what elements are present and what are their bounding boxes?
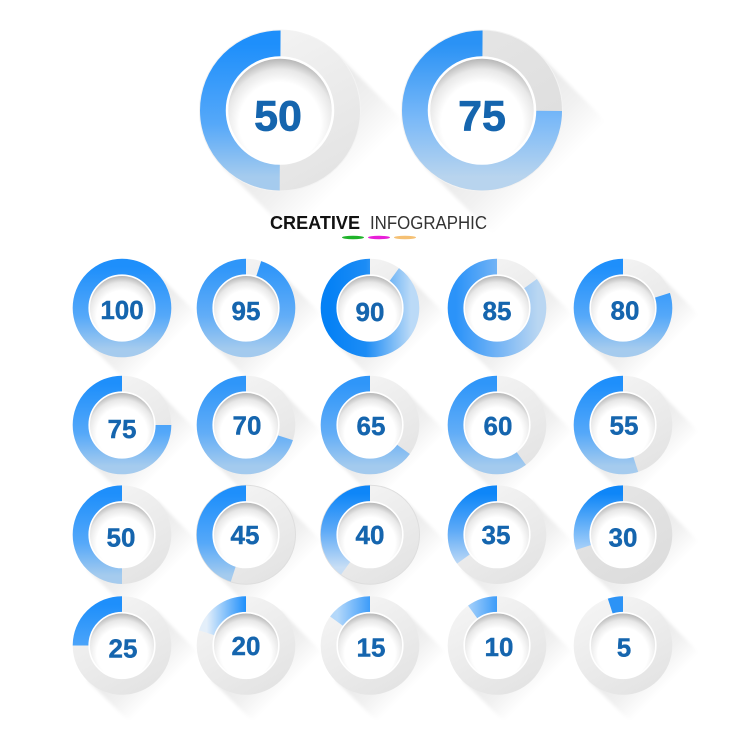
donut: large 75 <box>402 30 617 246</box>
donut: 35 <box>448 485 578 616</box>
value 50: 50 <box>254 92 302 140</box>
donut: 50 <box>73 485 203 616</box>
donut: 45 <box>196 485 327 616</box>
donut: 80 <box>574 259 704 389</box>
value 90: 90 <box>356 297 384 327</box>
donut: 65 <box>321 376 451 506</box>
value 80: 80 <box>611 296 639 326</box>
donut: 30 <box>574 485 704 616</box>
value 30: 30 <box>609 523 637 553</box>
value 75: 75 <box>458 92 506 140</box>
value 70: 70 <box>233 410 261 440</box>
title <box>270 213 487 233</box>
donut: 5 <box>574 596 704 727</box>
value 25: 25 <box>109 634 137 664</box>
value 50: 50 <box>107 523 135 553</box>
donut: 100 <box>73 259 203 389</box>
donut: 10 <box>448 596 578 727</box>
value 35: 35 <box>482 520 510 550</box>
donut: 15 <box>321 596 451 727</box>
donut: 70 <box>197 376 327 506</box>
donut: 95 <box>197 259 327 389</box>
title accent ovals <box>342 236 416 239</box>
value 60: 60 <box>484 411 512 441</box>
value 20: 20 <box>232 631 260 661</box>
value 5: 5 <box>617 632 631 662</box>
value 10: 10 <box>485 632 513 662</box>
value 95: 95 <box>232 296 260 326</box>
value 85: 85 <box>483 296 511 326</box>
title: CREATIVE <box>270 213 360 233</box>
donut: 55 <box>574 376 704 506</box>
donut: 90 <box>321 259 451 389</box>
value 15: 15 <box>357 632 385 662</box>
title: INFOGRAPHIC <box>370 213 487 233</box>
value 65: 65 <box>357 411 385 441</box>
value 55: 55 <box>610 410 638 440</box>
value 45: 45 <box>231 520 259 550</box>
value 100: 100 <box>100 295 144 325</box>
donut: 25 <box>73 596 203 727</box>
donut: 85 <box>448 259 578 389</box>
donut: 60 <box>448 376 578 506</box>
donut: 40 <box>320 485 451 616</box>
value 40: 40 <box>356 520 384 550</box>
donut: 75 <box>73 376 203 506</box>
donut: large 50 <box>200 30 415 246</box>
donut: 20 <box>197 596 327 727</box>
value 75: 75 <box>108 414 136 444</box>
